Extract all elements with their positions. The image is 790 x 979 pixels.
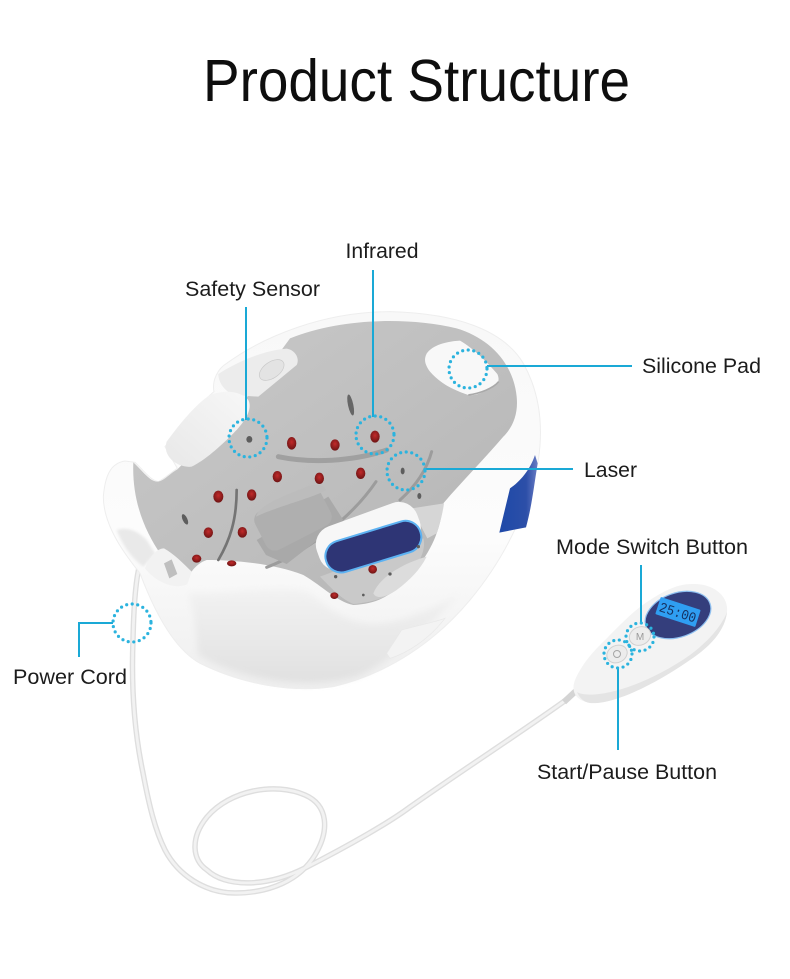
mode button: [626, 623, 654, 649]
callout: power cord: Power Cord: [13, 666, 127, 689]
left pad: [166, 392, 250, 467]
LCD time readout: 25:00: [657, 600, 698, 627]
callout: laser: Laser: [584, 459, 637, 482]
mode button glyph: M: [636, 632, 644, 643]
remote control: [564, 583, 727, 703]
helmet side panel: [387, 618, 445, 658]
remote lower edge shade: [577, 612, 727, 703]
sensor holes: [180, 436, 421, 596]
top left strip with oval button: [218, 349, 298, 397]
centre grey pad: [251, 483, 343, 564]
remote body: [574, 584, 727, 703]
power cord cable: [132, 546, 566, 893]
power button glyph: [614, 650, 620, 658]
callout: mode switch button: [556, 536, 748, 651]
front lower plate: [320, 538, 424, 604]
callout: infrared: Infrared: [346, 240, 418, 263]
start pause button: [604, 642, 630, 666]
helmet device: [103, 312, 540, 689]
front pad with blue oval: [310, 496, 444, 576]
silicone pad shadow edge: [468, 382, 499, 395]
cable strain relief: [564, 689, 578, 702]
callout: mode switch button: Mode Switch Button: [556, 536, 748, 559]
callout: power cord: [13, 604, 151, 689]
callout: laser: [387, 452, 637, 490]
callout: start pause button: [537, 640, 717, 784]
callout: safety sensor: Safety Sensor: [185, 278, 320, 301]
flap shading: [117, 529, 155, 567]
callout: infrared: [346, 240, 418, 454]
callout: safety sensor: [185, 278, 320, 457]
red LEDs: [192, 431, 380, 599]
title: Product Structure: [203, 48, 630, 114]
silicone pad: [425, 341, 499, 395]
display surround: [639, 583, 717, 647]
cord plug: [164, 559, 177, 578]
oval slot hole: [346, 394, 355, 416]
LCD screen: [655, 597, 701, 628]
callout: silicone pad: [449, 350, 761, 388]
cord socket: [145, 548, 192, 586]
callout: silicone pad: Silicone Pad: [642, 355, 761, 378]
helmet outer shell: [103, 312, 540, 689]
blue side window: [499, 455, 538, 533]
helmet inner grey cavity: [133, 321, 517, 605]
curved white plate: [373, 557, 427, 597]
callout: start pause button: Start/Pause Button: [537, 761, 717, 784]
helmet front body shading: [188, 590, 460, 683]
grey ribs: [218, 450, 432, 567]
